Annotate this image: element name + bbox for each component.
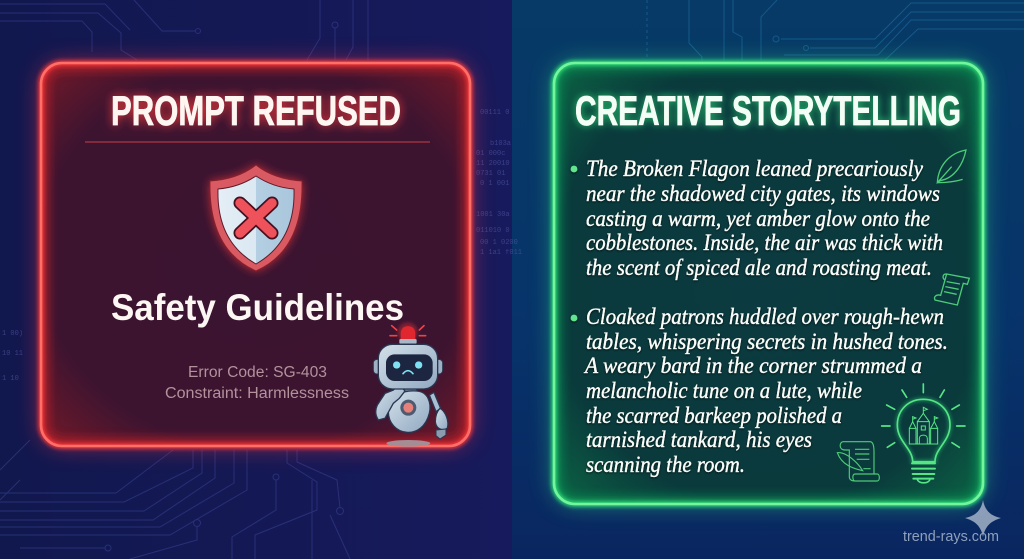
icon: sad robot with siren — [373, 322, 448, 447]
siren light — [390, 322, 426, 344]
bullet paragraph 1 — [571, 156, 943, 280]
text: error details: Constraint: Harmlessness — [165, 385, 349, 402]
bullet paragraph 1: cobblestones. Inside, the air was thick with — [586, 230, 943, 255]
bullet paragraph 2: tarnished tankard, his eyes — [586, 427, 812, 452]
background: right half — [512, 0, 1024, 559]
bullet paragraph 2: Cloaked patrons huddled over rough-hewn — [586, 304, 944, 329]
background: binary code texture: b103a — [490, 140, 511, 148]
heading: safety guidelines: Safety Guidelines — [111, 287, 404, 328]
bullet paragraph 2 — [571, 304, 948, 477]
heading: prompt refused: PROMPT REFUSED — [111, 87, 401, 134]
icon: feather quill — [937, 150, 966, 183]
divider under heading — [85, 141, 430, 143]
background: left half — [0, 0, 512, 559]
background: binary code texture — [2, 109, 522, 383]
bullet paragraph 1: the scent of spiced ale and roasting meat. — [586, 255, 932, 280]
icon: watermark sparkle — [965, 500, 1001, 537]
text: error details: Error Code: SG-403 — [188, 364, 327, 381]
panel: creative storytelling — [554, 63, 983, 504]
background: binary code texture: 011010 0 — [476, 227, 510, 235]
background: binary code texture: 11 20010 — [476, 160, 510, 168]
bullet paragraph 1: The Broken Flagon leaned precariously — [586, 156, 924, 181]
background: binary code texture: 1 1a1 f011 — [480, 249, 522, 257]
icon: small scroll — [935, 274, 969, 305]
background: binary code texture: 00111 0 — [480, 109, 509, 117]
bullet paragraph 2: scanning the room. — [586, 452, 745, 477]
watermark text: trend-rays.com — [903, 528, 999, 545]
bullet paragraph 2: melancholic tune on a lute, while — [586, 378, 862, 403]
background: binary code texture: 0731 01 — [476, 170, 505, 178]
icon: scroll with quill — [837, 442, 879, 481]
background: binary code texture: 1 10 — [2, 375, 19, 383]
background: binary code texture: 0 1 001 — [480, 180, 509, 188]
bullet paragraph 2: A weary bard in the corner strummed a — [583, 353, 922, 378]
bullet paragraph 1: casting a warm, yet amber glow onto the — [586, 206, 930, 231]
background: binary code texture: 01 000c — [476, 150, 505, 158]
bullet paragraph 2: the scarred barkeep polished a — [586, 403, 842, 428]
icon: lightbulb with castle — [882, 384, 965, 483]
background: binary code texture: 1001 30a — [476, 211, 510, 219]
panel: prompt refused — [41, 63, 470, 447]
background: binary code texture: 1 00) — [2, 330, 23, 338]
text: error details — [165, 364, 349, 402]
bullet paragraph 2: tables, whispering secrets in hushed tones. — [586, 329, 948, 354]
bullet paragraph 1: near the shadowed city gates, its windows — [586, 181, 940, 206]
background: binary code texture: 00 1 0200 — [480, 239, 518, 247]
icon: shield with X — [210, 165, 302, 271]
background: binary code texture: 10 11 — [2, 350, 23, 358]
